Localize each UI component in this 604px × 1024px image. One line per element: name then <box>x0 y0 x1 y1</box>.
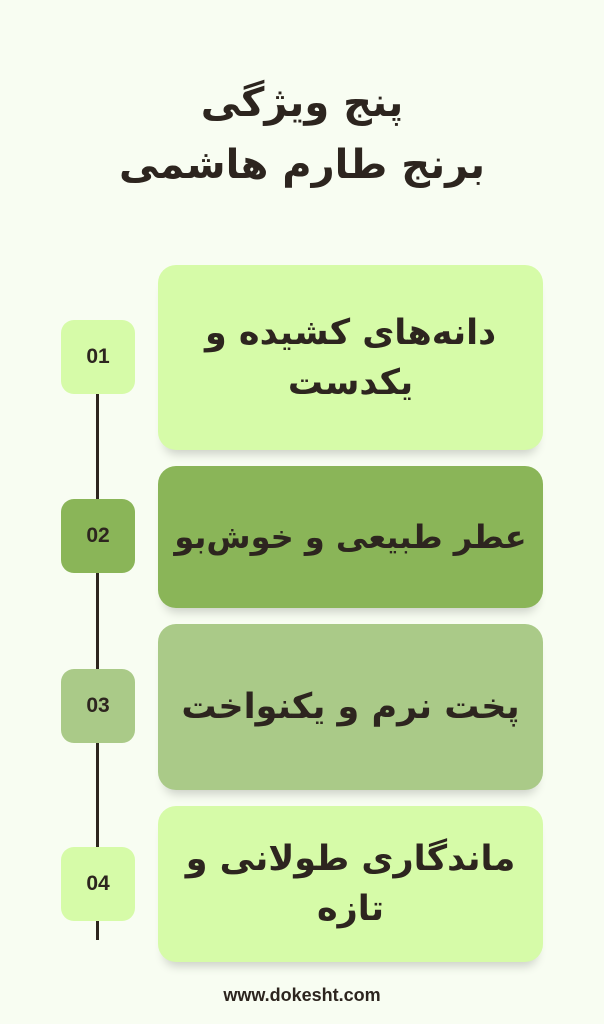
badge 01 <box>61 320 135 394</box>
card 1: یکدست <box>288 362 413 402</box>
card 4: تازه <box>317 889 384 929</box>
card 3: پخت نرم و یکنواخت <box>181 687 520 727</box>
badge 01: 01 <box>86 345 110 368</box>
badge 02 <box>61 499 135 573</box>
card 2: عطر طبیعی و خوش‌بو <box>174 518 527 556</box>
card 4: ماندگاری طولانی و <box>186 839 515 879</box>
title: پنج ویژگی <box>201 80 403 126</box>
card 1 <box>158 265 543 450</box>
card 1: دانه‌های کشیده و <box>205 312 496 352</box>
timeline line <box>96 394 99 940</box>
title: برنج طارم هاشمی <box>119 142 485 188</box>
title <box>119 80 485 188</box>
card 4 <box>158 806 543 962</box>
badge 03 <box>61 669 135 743</box>
card 3 <box>158 624 543 790</box>
badge 03: 03 <box>86 694 110 717</box>
card 2 <box>158 466 543 608</box>
badge 04: 04 <box>86 872 110 895</box>
badge 02: 02 <box>86 524 110 547</box>
badge 04 <box>61 847 135 921</box>
footer url: www.dokesht.com <box>223 985 381 1005</box>
